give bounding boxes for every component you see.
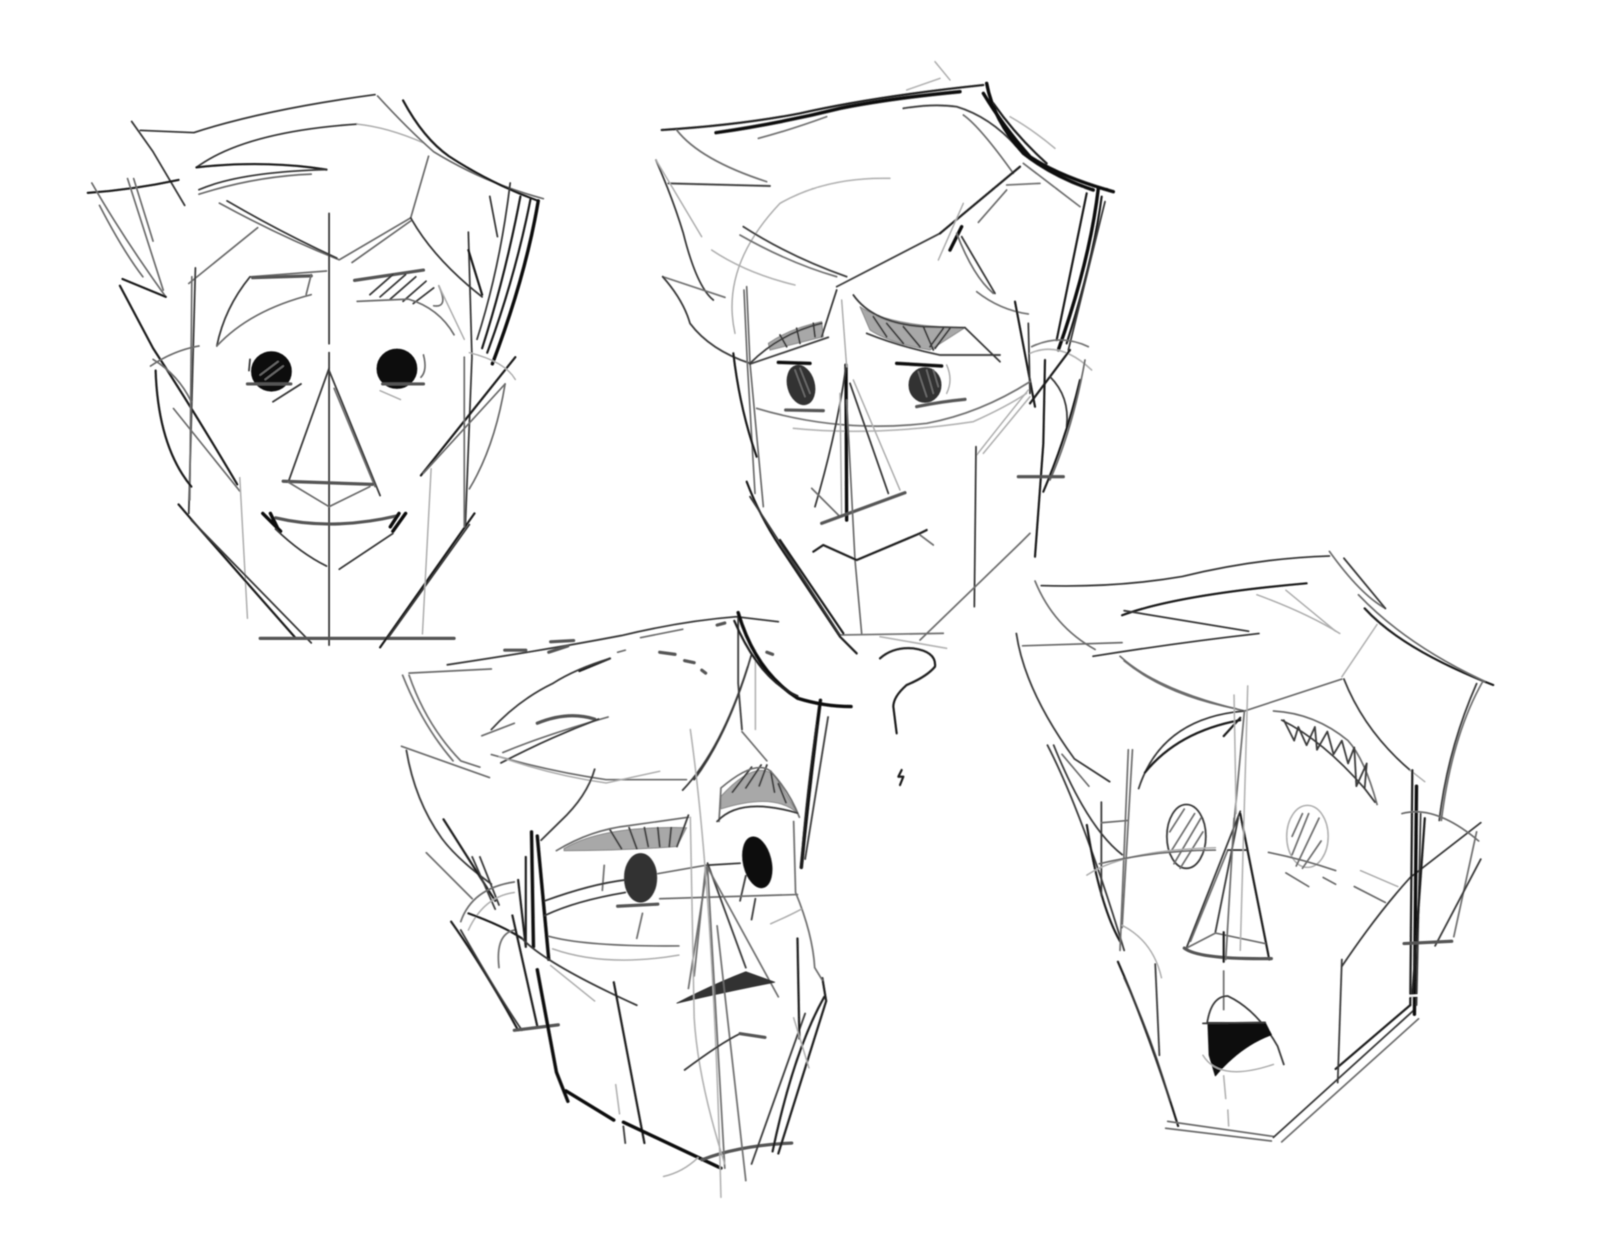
hair: [1016, 551, 1493, 820]
eyebrows: [1139, 711, 1377, 804]
guide bands: [1087, 848, 1398, 903]
nose: [812, 300, 905, 633]
eyes: [602, 833, 777, 938]
mouth: [813, 530, 933, 560]
open mouth: [1203, 971, 1284, 1126]
jaw and chin: [733, 287, 947, 653]
guide curves: [757, 382, 1030, 431]
eyebrows: [556, 765, 799, 851]
hair: [88, 95, 543, 527]
hair: [656, 62, 1113, 407]
guide bands: [545, 863, 801, 960]
nose: [283, 368, 380, 507]
sketch: frowning head, tilted view: [401, 613, 851, 1197]
eyebrows: [750, 290, 1000, 364]
sketch: smiling head, front view: [88, 95, 543, 647]
eyes: [247, 349, 425, 402]
squiggle mark: [880, 648, 935, 785]
nose: [677, 729, 778, 1197]
left side of head and ear: [426, 769, 637, 1030]
head outline and jaw: [1047, 745, 1481, 1142]
ear: [1402, 812, 1481, 946]
sketch: surprised head, open mouth: [1016, 551, 1493, 1142]
mouth: [685, 1034, 765, 1070]
eyes: [1167, 804, 1328, 868]
smile: [263, 513, 406, 569]
eyebrows: [217, 270, 464, 346]
hair: [401, 613, 851, 884]
eyes: [778, 362, 965, 411]
face construction lines: [151, 213, 515, 647]
ear and right side of head: [920, 340, 1092, 640]
jaw: [537, 821, 826, 1176]
nose: [1184, 686, 1271, 962]
sketch: worried head, three-quarter view: [656, 62, 1113, 785]
